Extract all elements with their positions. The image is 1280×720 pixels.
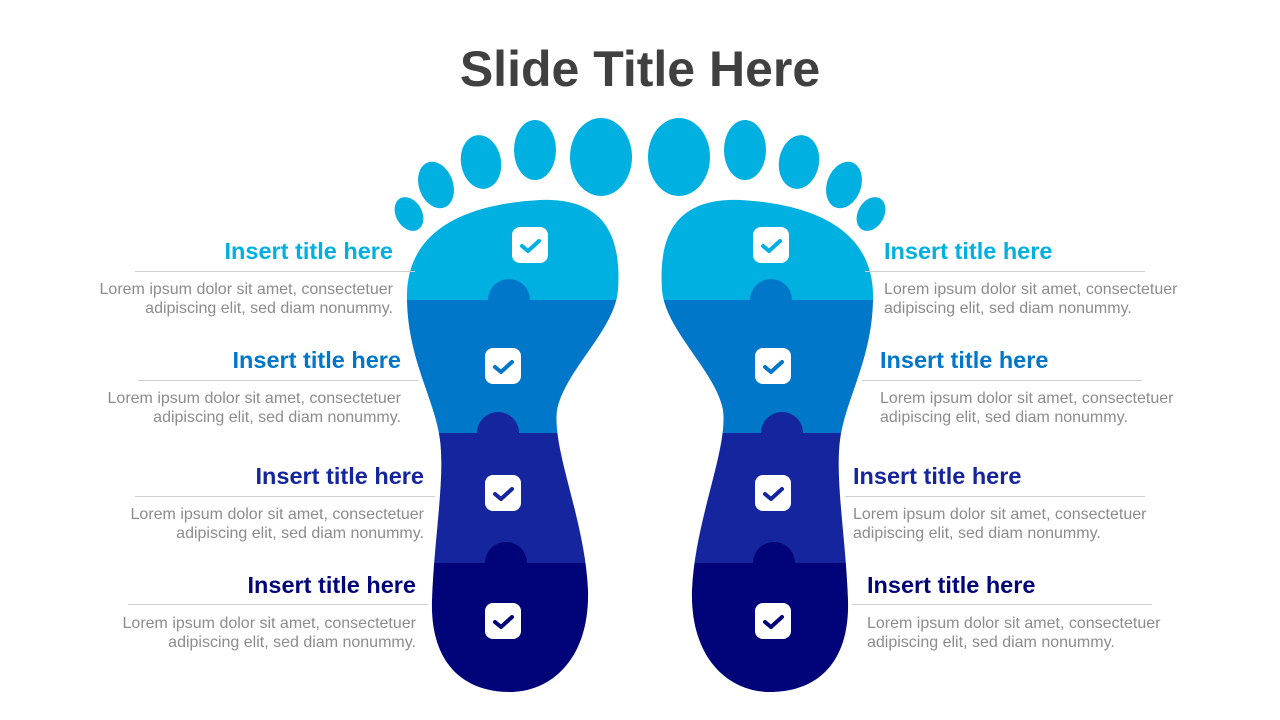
right foot (640, 118, 900, 703)
right item 3: Lorem ipsum dolor sit amet, consectetuer (853, 506, 1146, 523)
left item 4: adipiscing elit, sed diam nonummy. (168, 634, 416, 651)
left item 2: Insert title here (233, 347, 401, 373)
left item 3: Lorem ipsum dolor sit amet, consectetuer (131, 506, 424, 523)
title: Slide Title Here (460, 41, 820, 97)
right item 2: adipiscing elit, sed diam nonummy. (880, 409, 1128, 426)
left item 4 (123, 572, 428, 651)
left item 2 (108, 347, 418, 426)
left item 3: Insert title here (256, 463, 424, 489)
left item 2: adipiscing elit, sed diam nonummy. (153, 409, 401, 426)
left item 1: Lorem ipsum dolor sit amet, consectetuer (100, 281, 393, 298)
left item 1: adipiscing elit, sed diam nonummy. (145, 300, 393, 317)
left item 2: Lorem ipsum dolor sit amet, consectetuer (108, 390, 401, 407)
left item 3 (131, 463, 435, 542)
right item 3 (845, 463, 1146, 542)
left foot (380, 118, 640, 703)
right item 4 (852, 572, 1160, 651)
right item 4: Lorem ipsum dolor sit amet, consectetuer (867, 615, 1160, 632)
right item 4: Insert title here (867, 572, 1035, 598)
left item 1 (100, 238, 415, 317)
right item 1: adipiscing elit, sed diam nonummy. (884, 300, 1132, 317)
right item 1 (865, 238, 1178, 317)
right item 3: Insert title here (853, 463, 1021, 489)
feet graphic (394, 118, 886, 692)
left item 4: Lorem ipsum dolor sit amet, consectetuer (123, 615, 416, 632)
left item 4: Insert title here (248, 572, 416, 598)
left item 1: Insert title here (225, 238, 393, 264)
right item 2: Lorem ipsum dolor sit amet, consectetuer (880, 390, 1173, 407)
right item 2: Insert title here (880, 347, 1048, 373)
right item 2 (862, 347, 1174, 426)
right item 3: adipiscing elit, sed diam nonummy. (853, 525, 1101, 542)
right item 4: adipiscing elit, sed diam nonummy. (867, 634, 1115, 651)
left item 3: adipiscing elit, sed diam nonummy. (176, 525, 424, 542)
right item 1: Lorem ipsum dolor sit amet, consectetuer (884, 281, 1177, 298)
checkboxes (485, 227, 791, 639)
right item 1: Insert title here (884, 238, 1052, 264)
